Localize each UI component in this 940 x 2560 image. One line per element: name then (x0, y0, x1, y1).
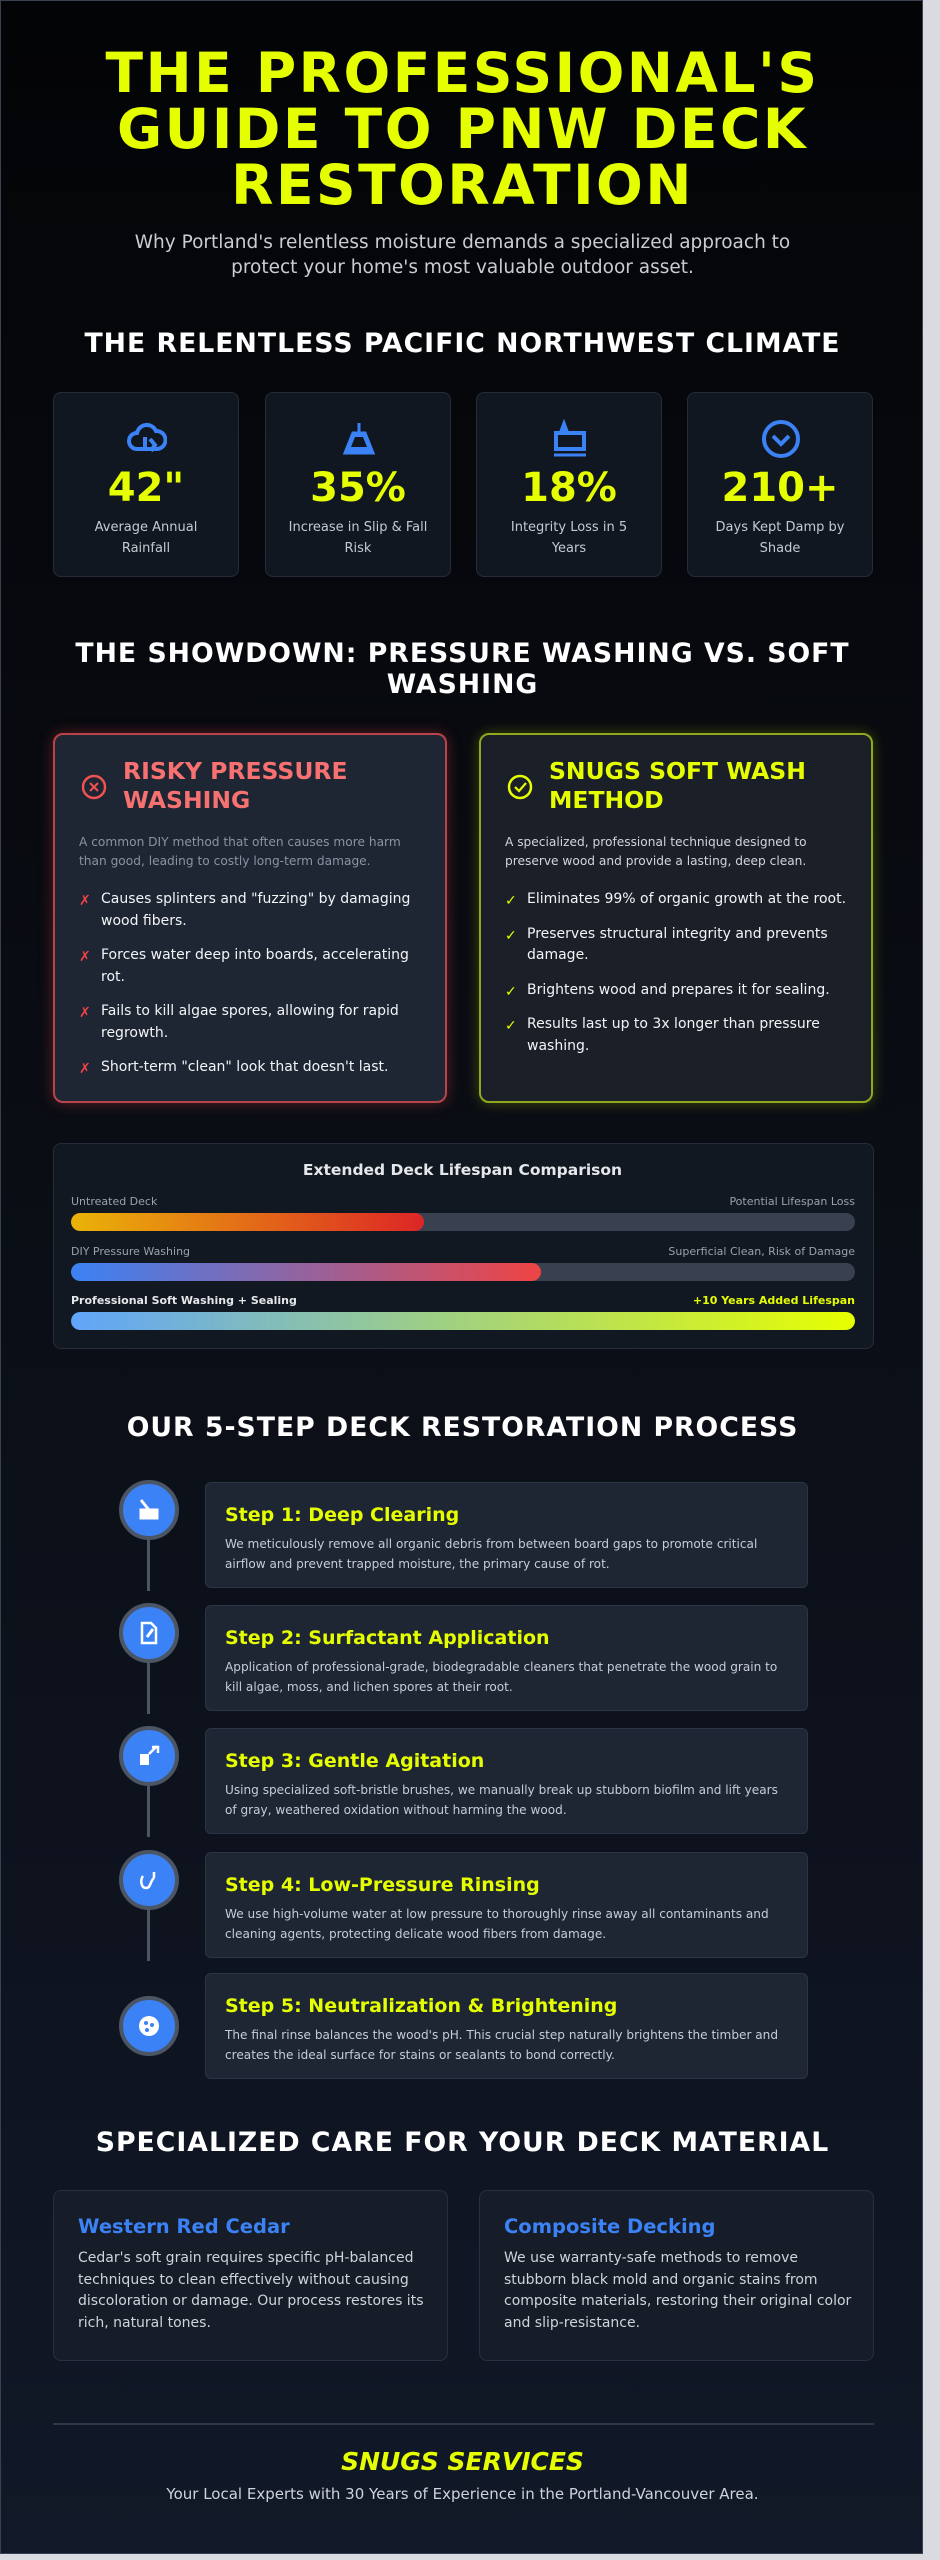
heading: materials: SPECIALIZED CARE FOR YOUR DECK MATERIAL (96, 2127, 829, 2158)
stat card: integrity: Integrity Loss in 5 Years (511, 520, 627, 556)
heading: showdown: THE SHOWDOWN: PRESSURE WASHING VS. SOFT (75, 638, 850, 669)
icon: check circle (508, 774, 532, 800)
icon: board (554, 419, 586, 456)
icon: circle chevron (762, 420, 800, 458)
panel: soft wash: ✓ (505, 1018, 517, 1034)
title: THE PROFESSIONAL'S (106, 41, 819, 105)
stat card: slip (265, 392, 451, 577)
icon: warning cone (342, 423, 376, 454)
subtitle: Why Portland's relentless moisture demands a specialized approach to protect your home's most valuable outdoor asset. (135, 232, 790, 278)
panel: cedar: Cedar's soft grain requires specific pH-balanced techniques to clean effectively without causing discoloration or damage. Our process restores its rich, natural tones. (78, 2250, 423, 2330)
step 5: The final rinse balances the wood's pH. This crucial step naturally brightens the timber and creates the ideal surface for stains or sealants to bond correctly. (225, 2028, 778, 2062)
panel: pressure washing: Fails to kill algae spores, allowing for rapid regrowth. (101, 1003, 399, 1040)
title: RESTORATION (231, 153, 694, 217)
step 3: Using specialized soft-bristle brushes, we manually break up stubborn biofilm and lift years of gray, weathered oxidation without harming the wood. (225, 1783, 778, 1817)
text: Potential Lifespan Loss (729, 1195, 855, 1208)
icon: step 1 (119, 1480, 179, 1540)
footer tagline: Your Local Experts with 30 Years of Experience in the Portland-Vancouver Area. (166, 2485, 759, 2503)
footer brand: SNUGS SERVICES (341, 2447, 584, 2476)
panel: composite: Composite Decking (504, 2215, 715, 2238)
heading: showdown: WASHING (387, 669, 538, 700)
title (106, 41, 819, 217)
heading: climate: THE RELENTLESS PACIFIC NORTHWEST CLIMATE (84, 328, 841, 359)
step 3: Step 3: Gentle Agitation (225, 1750, 484, 1772)
panel: soft wash: Results last up to 3x longer than pressure washing. (527, 1016, 820, 1054)
panel: soft wash: ✓ (505, 893, 517, 909)
stat card: shade (687, 392, 873, 577)
stat card: shade: Days Kept Damp by Shade (716, 520, 844, 556)
step 4: Step 4: Low-Pressure Rinsing (225, 1874, 540, 1896)
text: Extended Deck Lifespan Comparison (303, 1161, 622, 1179)
step 4: We use high-volume water at low pressure to thoroughly rinse away all contaminants and cleaning agents, protecting delicate wood fibers from damage. (225, 1907, 769, 1941)
step 2 (205, 1605, 808, 1711)
step 1: We meticulously remove all organic debris from between board gaps to promote critical airflow and prevent trapped moisture, the primary cause of rot. (225, 1537, 757, 1571)
panel: pressure washing: ✗ (79, 949, 91, 965)
stat card: rainfall: Average Annual Rainfall (95, 520, 197, 556)
panel: pressure washing (53, 733, 447, 1103)
panel: pressure washing: ✗ (79, 1061, 91, 1077)
panel: pressure washing: WASHING (123, 786, 250, 814)
icon: x circle (82, 774, 106, 800)
panel: soft wash (479, 733, 873, 1103)
icon: cloud rain (127, 422, 167, 452)
icon: step 5 (119, 1996, 179, 2056)
text: Untreated Deck (71, 1195, 157, 1208)
panel: soft wash: A specialized, professional technique designed to preserve wood and provide a lasting, deep clean. (505, 835, 807, 868)
panel: soft wash: ✓ (505, 984, 517, 1000)
panel: soft wash: SNUGS SOFT WASH (549, 757, 806, 785)
stat card: rainfall: 42" (108, 465, 184, 511)
stat card: rainfall (53, 392, 239, 577)
panel: cedar (53, 2190, 448, 2361)
panel: pressure washing: Forces water deep into boards, accelerating rot. (101, 947, 409, 984)
chart: lifespan comparison (53, 1143, 874, 1349)
panel: pressure washing: ✗ (79, 893, 91, 909)
panel: soft wash: Preserves structural integrity and prevents damage. (527, 926, 828, 963)
panel: soft wash: Brightens wood and prepares it for sealing. (527, 982, 830, 998)
panel: soft wash: ✓ (505, 928, 517, 944)
icon: step 2 (119, 1603, 179, 1663)
stat card: slip: Increase in Slip & Fall Risk (289, 520, 427, 556)
step 5: Step 5: Neutralization & Brightening (225, 1995, 617, 2017)
heading: showdown (75, 638, 850, 700)
panel: soft wash: Eliminates 99% of organic growth at the root. (527, 891, 846, 907)
panel: composite (479, 2190, 874, 2361)
step 3 (205, 1728, 808, 1834)
panel: pressure washing: A common DIY method that often causes more harm than good, leading to costly long-term damage. (79, 835, 401, 868)
panel: pressure washing: RISKY PRESSURE (123, 757, 348, 785)
step 2: Step 2: Surfactant Application (225, 1627, 550, 1649)
step 4 (205, 1852, 808, 1958)
text: Professional Soft Washing + Sealing (71, 1294, 297, 1307)
panel: pressure washing: Short-term "clean" look that doesn't last. (101, 1059, 388, 1075)
panel: pressure washing: Causes splinters and "fuzzing" by damaging wood fibers. (101, 891, 410, 928)
text: Superficial Clean, Risk of Damage (668, 1245, 855, 1258)
stat card: integrity (476, 392, 662, 577)
icon: step 4 (119, 1850, 179, 1910)
step 1 (205, 1482, 808, 1588)
panel: soft wash: METHOD (549, 786, 664, 814)
icon: step 3 (119, 1726, 179, 1786)
stat card: slip: 35% (310, 465, 406, 511)
title: GUIDE TO PNW DECK (117, 97, 808, 161)
step 5 (205, 1973, 808, 2079)
panel: cedar: Western Red Cedar (78, 2215, 290, 2238)
step 1: Step 1: Deep Clearing (225, 1504, 459, 1526)
text: +10 Years Added Lifespan (693, 1294, 855, 1307)
heading: process: OUR 5-STEP DECK RESTORATION PROCESS (127, 1412, 798, 1443)
stat card: shade: 210+ (721, 465, 838, 511)
text: DIY Pressure Washing (71, 1245, 190, 1258)
panel: composite: We use warranty-safe methods to remove stubborn black mold and organic stains from composite materials, restoring their original color and slip-resistance. (504, 2250, 851, 2330)
step 2: Application of professional-grade, biodegradable cleaners that penetrate the wood grain to kill algae, moss, and lichen spores at their root. (225, 1660, 777, 1694)
panel: pressure washing: ✗ (79, 1005, 91, 1021)
stat card: integrity: 18% (521, 465, 617, 511)
